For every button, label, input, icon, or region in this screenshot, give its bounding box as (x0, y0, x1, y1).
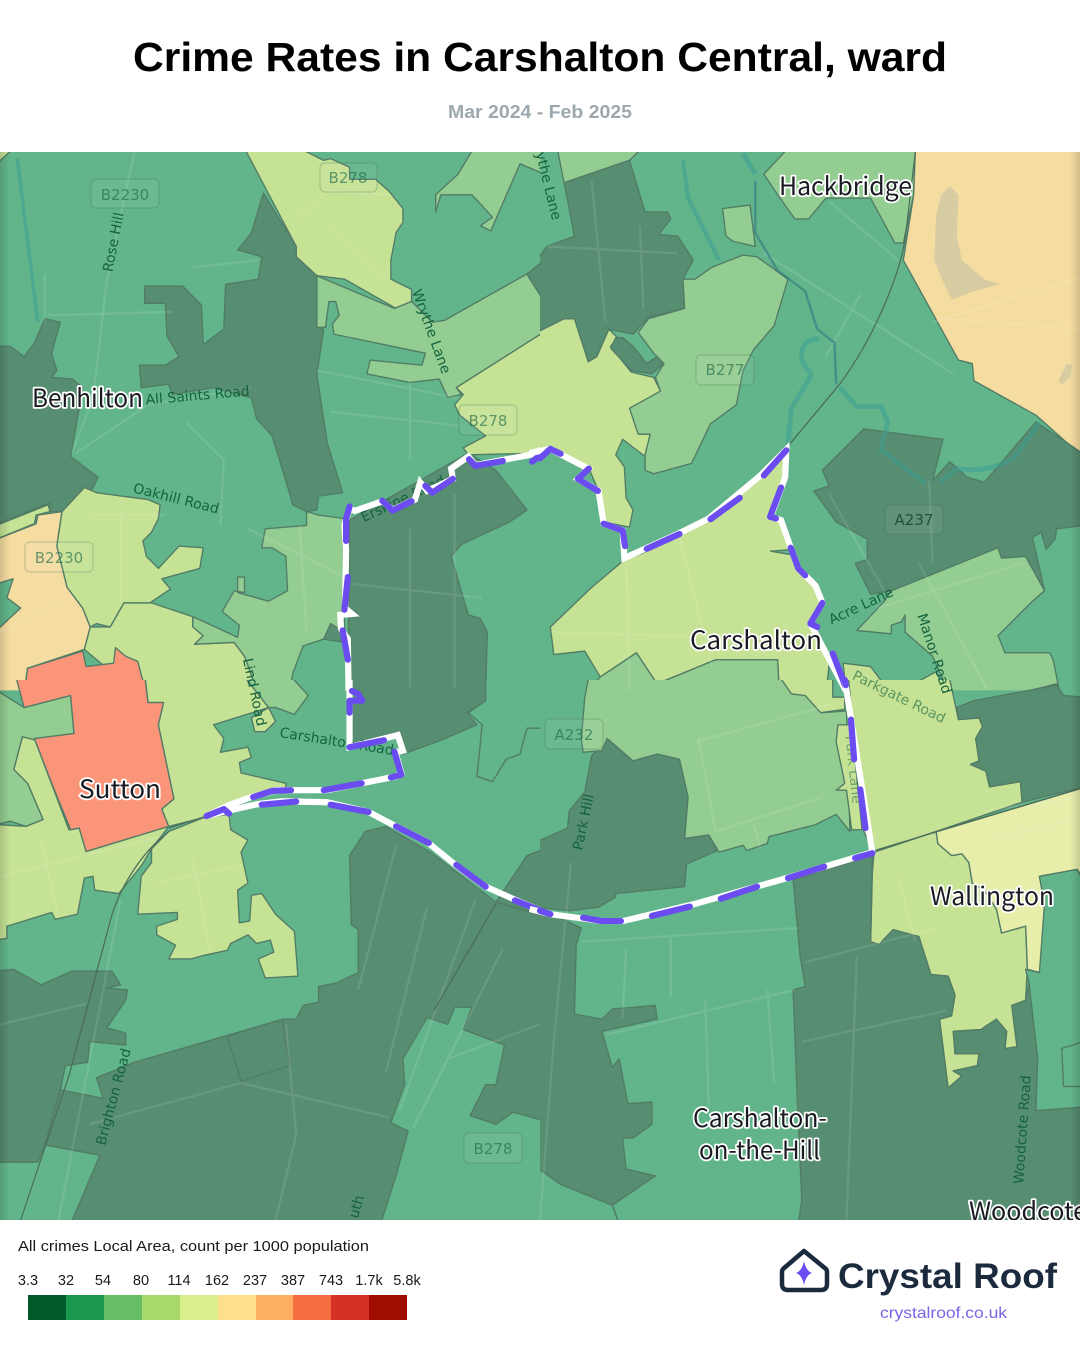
legend scale values: 162 (205, 1273, 229, 1289)
shield: B277: B277 (706, 361, 744, 379)
road label: Parkgate Road: Parkgate Road (850, 668, 948, 727)
choropleth: south-east areas (537, 677, 1080, 1224)
legend scale values: 32 (58, 1273, 74, 1289)
shield: B278 north: B278 (329, 169, 367, 187)
road label: All Saints Road: All Saints Road (145, 383, 250, 409)
shield: B277 (696, 355, 754, 385)
subtitle: date range: Mar 2024 - Feb 2025 (448, 102, 632, 122)
railway lines (21, 152, 1080, 1220)
place: Carshalton-on-the-Hill (693, 1099, 827, 1167)
legend (18, 1238, 421, 1320)
ward boundary: dashed white and purple outline (207, 449, 872, 921)
legend scale values: 114 (167, 1273, 191, 1289)
road label: Carshalton Road: Carshalton Road (278, 725, 395, 759)
legend scale values: 54 (95, 1273, 111, 1289)
road label: Brighton Road: Brighton Road (94, 1047, 135, 1147)
road label: Park Hill: Park Hill (570, 793, 598, 852)
shield: B278 south (464, 1133, 522, 1163)
shield: A232: A232 (555, 726, 593, 744)
legend scale values: 237 (243, 1273, 267, 1289)
street network (0, 152, 1080, 1220)
shield: A232 (545, 719, 603, 749)
legend scale values (18, 1273, 421, 1289)
place: Hackbridge: Hackbridge (779, 167, 912, 203)
road label: Park Lane: Park Lane (841, 735, 865, 805)
road label: Acre Lane: Acre Lane (826, 584, 896, 628)
shield: A237: A237 (895, 511, 933, 529)
shield: B278 centre (459, 405, 517, 435)
choropleth: south-west areas (0, 677, 544, 1224)
shield: B278 centre: B278 (469, 412, 507, 430)
road labels (94, 150, 1035, 1220)
place: Carshalton: Carshalton (690, 621, 822, 657)
shield: B2230 west (25, 542, 93, 572)
place: Benhilton: Benhilton (32, 379, 143, 415)
shield: B278 north (320, 163, 377, 192)
road label: Wrythe Lane: Wrythe Lane (408, 287, 453, 376)
road label: Woodcote Road: Woodcote Road (1011, 1075, 1035, 1185)
wordmark: Crystal Roof (838, 1257, 1057, 1296)
place: Sutton: Sutton (79, 770, 161, 806)
map panel (0, 148, 1080, 1228)
shield: B2230 north (91, 179, 159, 208)
legend scale values: 3.3 (18, 1273, 38, 1289)
legend scale values: 5.8k (393, 1273, 421, 1289)
legend scale values: 80 (133, 1273, 149, 1289)
legend title: All crimes Local Area, count per 1000 population (18, 1238, 369, 1255)
road label: Rose Hill: Rose Hill (100, 211, 128, 273)
shield: B278 south: B278 (474, 1140, 512, 1158)
map edge shading (0, 152, 1080, 1220)
legend scale values: 1.7k (355, 1273, 383, 1289)
title: Crime Rates in Carshalton Central, ward (133, 34, 947, 80)
legend scale values: 743 (319, 1273, 343, 1289)
legend scale values: 387 (281, 1273, 305, 1289)
place labels (32, 167, 1080, 1228)
icon: house with sparkle (782, 1251, 827, 1290)
choropleth: north-east areas (537, 148, 1080, 694)
place: Wallington: Wallington (930, 877, 1054, 913)
road label: Manor Road: Manor Road (913, 612, 954, 696)
place: Carshalton-on-the-Hill: on-the-Hill (699, 1131, 820, 1167)
road label: Wrythe Lane north: ythe Lane (532, 150, 564, 222)
logo: Crystal Roof (782, 1251, 1057, 1322)
choropleth: north-west areas (0, 148, 544, 694)
road label: Lind Road: Lind Road (239, 657, 269, 728)
road label: Oakhill Road: Oakhill Road (131, 481, 221, 518)
shield: A237 (885, 505, 943, 534)
road shields (25, 163, 943, 1163)
road label: South: uth (346, 1194, 368, 1220)
shield: B2230 west: B2230 (35, 549, 83, 567)
legend colour ramp (28, 1295, 407, 1320)
river wandle (17, 153, 1039, 484)
shield: B2230 north: B2230 (101, 186, 149, 204)
website link: crystalroof.co.uk (880, 1305, 1008, 1322)
place: Carshalton-on-the-Hill: Carshalton- (693, 1099, 827, 1135)
road label: Erskine Road: Erskine Road (359, 473, 448, 526)
